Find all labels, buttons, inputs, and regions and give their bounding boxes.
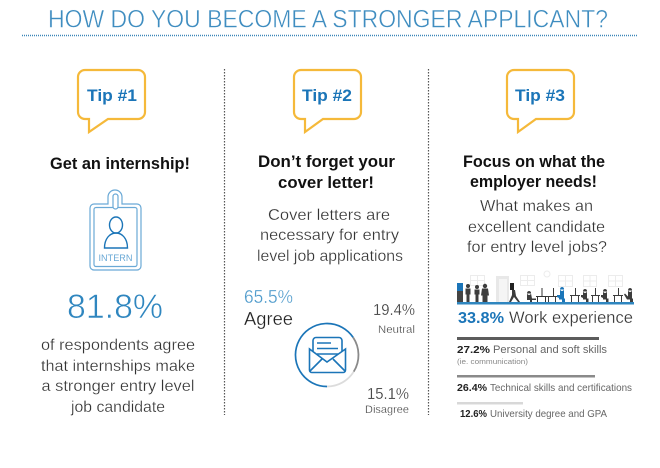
stat: disagree 15.1%: Disagree — [365, 404, 409, 416]
text: question: for entry level jobs? — [467, 239, 607, 256]
heading: employer needs: Focus on what the — [463, 152, 605, 171]
stat: work experience 33.8% — [458, 308, 633, 327]
bar: technical skills: 26.4% — [457, 383, 487, 394]
stat: neutral 19.4% — [373, 302, 415, 336]
heading: cover letter — [258, 152, 395, 192]
text: internship description: that internships make — [41, 358, 195, 375]
water cooler — [457, 283, 463, 302]
text: cover letter description — [257, 207, 403, 265]
text: internship description: job candidate — [70, 399, 165, 416]
speech bubble: tip 1: Tip #1 — [87, 86, 137, 105]
bar: personal and soft skills: (ie. communication) — [457, 357, 529, 366]
text: internship description — [41, 337, 195, 416]
stat: work experience 33.8%: 33.8% — [458, 310, 504, 327]
stat: disagree 15.1%: 15.1% — [367, 386, 409, 403]
donut chart with envelope icon — [295, 324, 358, 386]
icon: intern badge: INTERN — [98, 253, 132, 263]
bar: university degree — [457, 402, 607, 420]
stat: neutral 19.4%: 19.4% — [373, 302, 415, 319]
heading: get an internship: Get an internship! — [50, 154, 190, 173]
heading: cover letter: cover letter! — [278, 173, 374, 192]
bar: personal and soft skills — [457, 337, 608, 366]
heading: employer needs: employer needs! — [470, 172, 597, 191]
panel: tip 3 — [457, 70, 634, 420]
bar: university degree: University degree and GPA — [490, 408, 607, 420]
illustration: office workers — [457, 271, 634, 304]
stat: neutral 19.4%: Neutral — [378, 324, 415, 336]
bar: university degree: 12.6% — [460, 409, 487, 420]
bar: personal and soft skills: Personal and soft skills — [493, 344, 608, 356]
panel: tip 2 — [244, 70, 415, 416]
icon: intern badge — [90, 190, 141, 270]
stat: 81.8%: 81.8% — [67, 288, 163, 326]
heading: cover letter: Don’t forget your — [258, 152, 395, 171]
speech bubble: tip 2 — [294, 70, 361, 132]
panel: tip 1 — [41, 70, 195, 416]
text: internship description: a stronger entry level — [42, 378, 194, 395]
stat: disagree 15.1% — [365, 386, 409, 416]
stat: agree 65.5%: 65.5% — [244, 287, 293, 307]
stat: work experience 33.8%: Work experience — [509, 308, 633, 327]
speech bubble: tip 3 — [507, 70, 574, 132]
speech bubble: tip 3: Tip #3 — [515, 86, 565, 105]
text: question: excellent candidate — [468, 219, 605, 236]
text: cover letter description: Cover letters are — [268, 207, 390, 224]
title: HOW DO YOU BECOME A STRONGER APPLICANT? — [48, 6, 608, 34]
text: cover letter description: level job applications — [257, 248, 403, 265]
bar: technical skills: Technical skills and certifications — [490, 382, 632, 394]
stat: agree 65.5%: Agree — [244, 309, 293, 329]
text: question — [467, 198, 607, 256]
bar: personal and soft skills: 27.2% — [457, 344, 491, 356]
speech bubble: tip 1 — [78, 70, 145, 132]
text: cover letter description: necessary for entry — [260, 227, 399, 244]
stat: agree 65.5% — [244, 287, 293, 329]
heading: employer needs — [463, 152, 605, 191]
bar: technical skills — [457, 375, 632, 394]
text: internship description: of respondents agree — [41, 337, 195, 354]
text: question: What makes an — [480, 198, 593, 215]
speech bubble: tip 2: Tip #2 — [302, 86, 352, 105]
